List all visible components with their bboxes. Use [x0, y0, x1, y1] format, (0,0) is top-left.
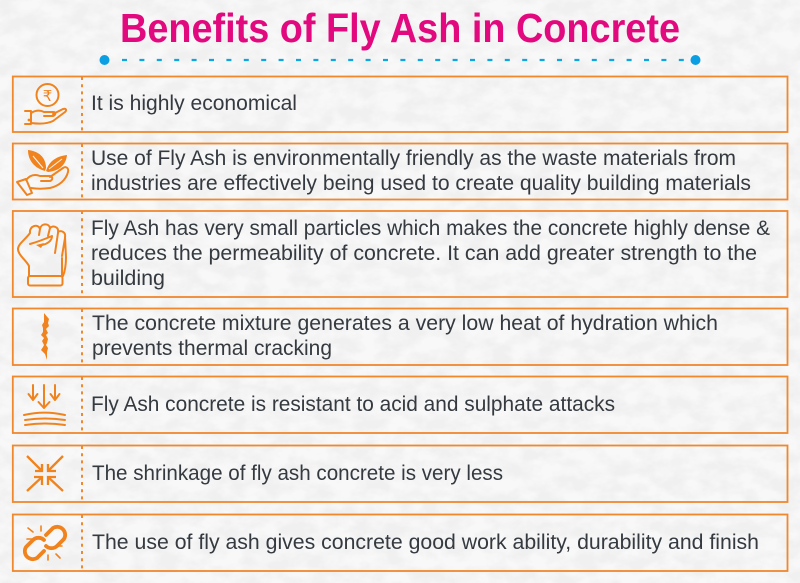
- panel: environment: [13, 144, 788, 200]
- icon: coin in hand: ₹: [43, 87, 52, 105]
- text: resistance: Fly Ash concrete is resistant to acid and sulphate attacks: [91, 393, 615, 416]
- text: density: building: [91, 267, 165, 290]
- title: Benefits of Fly Ash in Concrete: [120, 5, 680, 51]
- text: density: [91, 217, 770, 290]
- icon: leaves in hand: [17, 150, 68, 195]
- icon: coin in hand: [25, 84, 66, 124]
- panel: density: [13, 211, 788, 297]
- icon: inward arrows: [27, 456, 63, 491]
- text: economical: It is highly economical: [91, 92, 297, 115]
- icon: broken chain link: [25, 526, 65, 560]
- text: low heat: [92, 312, 718, 360]
- panel: low heat: [13, 308, 788, 365]
- text: environment: industries are effectively being used to create quality building materials: [91, 172, 751, 195]
- text: environment: [91, 147, 751, 195]
- text: density: reduces the permeability of concrete. It can add greater strength to the: [91, 242, 757, 265]
- panel: resistance: [13, 376, 788, 433]
- text: workability: The use of fly ash gives concrete good work ability, durability and finish: [92, 531, 759, 554]
- text: low heat: The concrete mixture generates a very low heat of hydration which: [92, 312, 718, 335]
- icon: crack: [41, 313, 49, 360]
- icon: fist: [18, 224, 66, 286]
- panel: economical: [13, 76, 788, 132]
- title divider: [100, 55, 700, 65]
- panel: shrinkage: [13, 446, 788, 502]
- icon: arrows onto layers: [24, 385, 65, 425]
- text: density: Fly Ash has very small particles which makes the concrete highly dense &: [91, 217, 770, 240]
- text: shrinkage: The shrinkage of fly ash concrete is very less: [92, 462, 503, 485]
- text: environment: Use of Fly Ash is environmentally friendly as the waste materials from: [91, 147, 736, 170]
- panel: workability: [13, 514, 788, 571]
- text: low heat: prevents thermal cracking: [92, 337, 332, 360]
